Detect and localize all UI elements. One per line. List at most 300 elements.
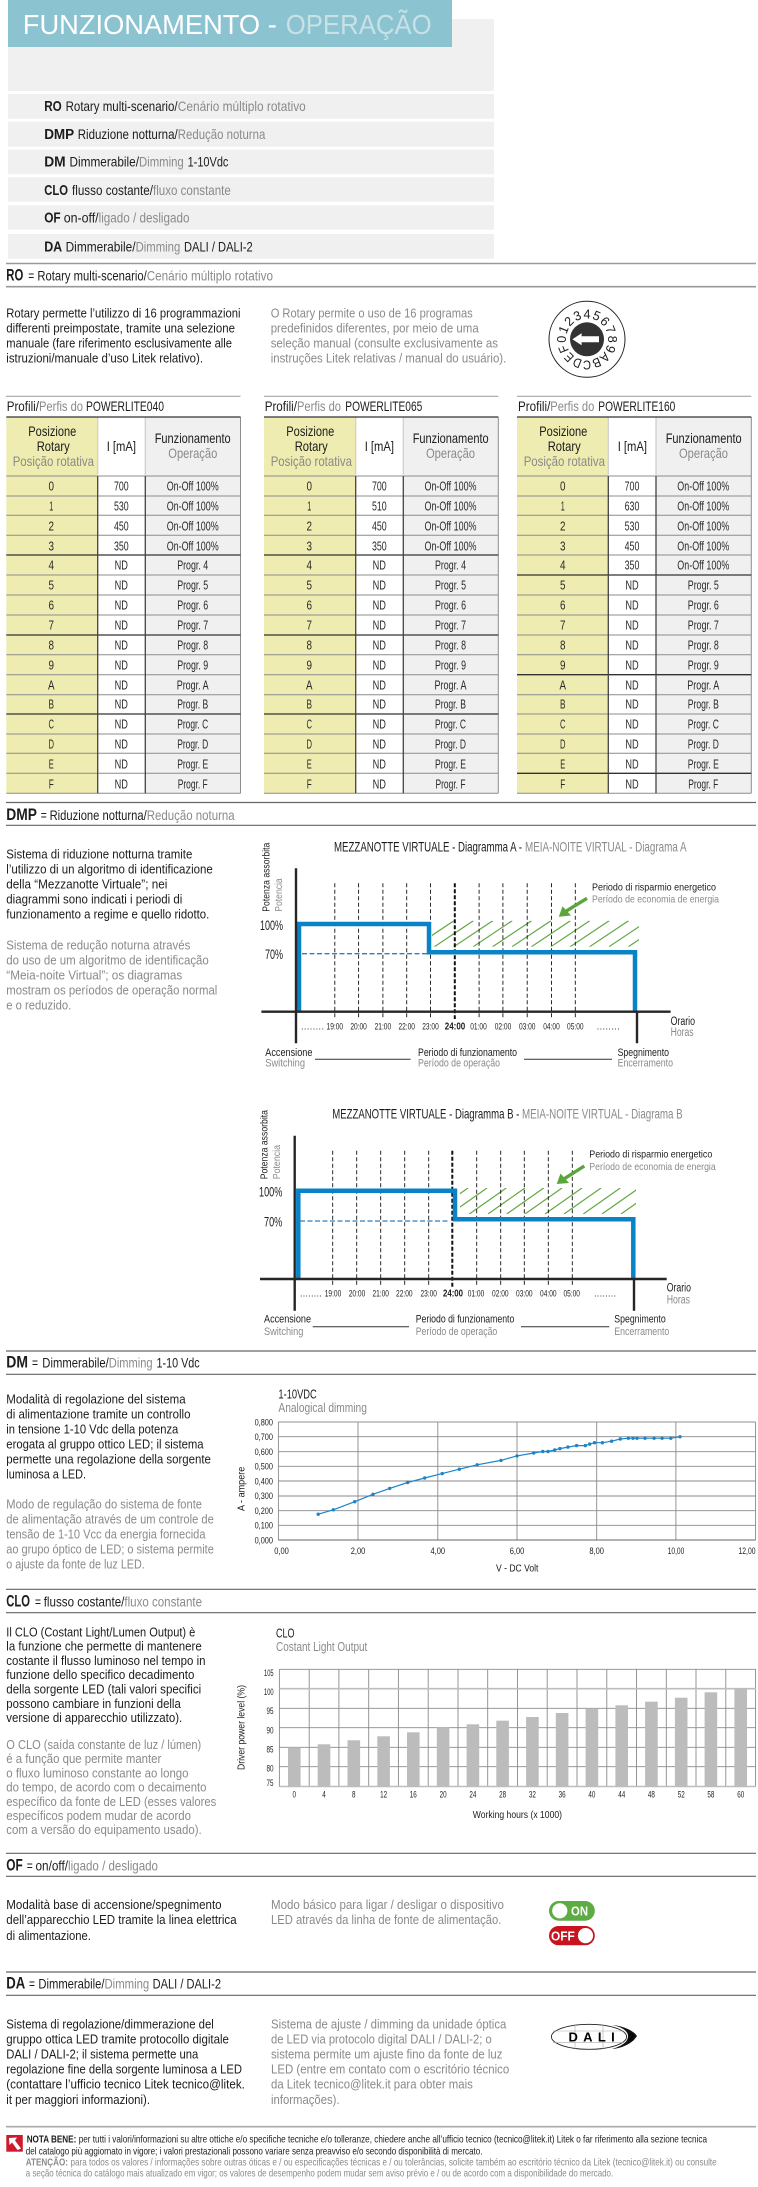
timeline captions: Periodo di funzionamento	[416, 1313, 514, 1325]
y tick labels: 0,500	[255, 1462, 273, 1472]
table rows: Progr. F	[178, 777, 208, 791]
note text: del catalogo più aggiornato in vigore; i valori prestazionali possono variare senza preavviso e/o secondo disponibilità di mercato.	[26, 2146, 483, 2158]
table rows: Progr. C	[435, 717, 466, 731]
data line	[318, 1437, 680, 1514]
table rows: B	[560, 697, 565, 711]
table rows: 1	[561, 499, 565, 513]
text block: DM italian: di alimentazione tramite un controllo	[6, 1406, 190, 1421]
heading: RO: Rotary multi-scenario/	[37, 268, 147, 284]
table rows: Progr. C	[688, 717, 719, 731]
chart: diagram B	[259, 1105, 716, 1338]
icon: rotary dial: 8	[605, 336, 620, 343]
table rows: Progr. 4	[177, 558, 208, 572]
table rows: Progr. F	[436, 777, 466, 791]
table rows: B	[49, 697, 54, 711]
icon: off toggle: OFF	[551, 1928, 575, 1943]
table: POWERLITE065	[264, 396, 498, 793]
table rows: 9	[307, 658, 312, 672]
x tick labels: 52	[678, 1789, 685, 1799]
text block: DMP portuguese: e o reduzido.	[6, 997, 71, 1012]
table rows: Progr. 5	[688, 578, 719, 592]
y tick labels: 85	[266, 1744, 274, 1754]
text block: DM italian: in tensione 1-10 Vdc della potenza	[6, 1421, 179, 1436]
table rows: ND	[625, 678, 639, 692]
text block: CLO italian: la funzione che permette di mantenere	[6, 1639, 202, 1654]
time labels: 05:00	[563, 1289, 580, 1299]
table rows: 6	[49, 598, 54, 612]
table rows: 4	[49, 558, 54, 572]
chart title: MEIA-NOITE VIRTUAL - Diagrama B	[522, 1105, 683, 1121]
x tick labels: 2,00	[351, 1546, 365, 1556]
table rows: D	[307, 737, 312, 751]
table rows: Progr. A	[687, 678, 720, 692]
index row: DA	[8, 234, 494, 259]
table rows: 0	[307, 479, 312, 493]
table rows: ND	[115, 757, 128, 771]
y tick labels: 90	[266, 1726, 274, 1736]
index row: DMP	[8, 122, 494, 147]
y axis labels: 100%	[259, 1184, 282, 1200]
arrow	[559, 898, 587, 917]
time labels: Horas	[671, 1027, 694, 1039]
text block: RO italian: manuale (fare riferimento esclusivamente alle	[6, 335, 232, 350]
index row: CLO: flusso costante/	[72, 182, 153, 198]
table rows: 510	[372, 499, 387, 513]
icon: rotary dial: C	[583, 357, 591, 372]
heading: DA: DA	[6, 1974, 25, 1993]
table rows: 0	[560, 479, 565, 493]
heading: DA	[6, 1974, 221, 1993]
index row: DMP: Riduzione notturna/	[78, 126, 178, 142]
y axis labels	[260, 842, 285, 962]
arrow	[557, 1166, 584, 1184]
table rows: 700	[114, 479, 129, 493]
table rows: On-Off 100%	[677, 499, 729, 513]
table rows: Progr. 5	[435, 578, 466, 592]
table rows: A	[48, 678, 55, 692]
y axis labels: 100%	[260, 917, 283, 933]
text block: CLO italian: versione di apparecchio utilizzato).	[6, 1710, 182, 1725]
table header: Posizione	[28, 423, 76, 439]
y tick labels	[264, 1668, 274, 1788]
x tick labels: 10,00	[668, 1546, 684, 1556]
table rows: Progr. 6	[435, 598, 466, 612]
table header: I [mA]	[365, 438, 394, 454]
timeline captions: Spegnimento	[618, 1047, 669, 1059]
table rows: ND	[625, 618, 639, 632]
y axis labels: Potenza assorbita	[262, 842, 273, 912]
index row: DM: Dimming	[139, 154, 184, 170]
timeline captions: Periodo di funzionamento	[418, 1047, 517, 1059]
table rows	[559, 479, 729, 791]
text block: CLO portuguese: específico da fonte de LED (esses valores	[6, 1794, 217, 1809]
table rows: ND	[115, 777, 128, 791]
heading: RO: RO	[6, 266, 23, 285]
table header	[13, 423, 231, 469]
icon: rotary dial: F	[555, 343, 572, 355]
text block: DMP portuguese: mostram os períodos de operação normal	[6, 982, 217, 997]
text block: RO portuguese: seleção manual (consulte exclusivamente as	[271, 335, 498, 350]
index row: DA: DA	[44, 239, 62, 256]
y tick labels: 0,300	[255, 1491, 273, 1501]
time labels: 03:00	[516, 1289, 533, 1299]
text block: DMP italian: diagrammi sono indicati i periodi di	[6, 891, 182, 906]
text block: CLO italian: Il CLO (Costant Light/Lumen Output) è	[6, 1624, 195, 1639]
table rows: ND	[115, 598, 128, 612]
x tick labels: 24	[469, 1789, 476, 1799]
table rows: 530	[114, 499, 129, 513]
x tick labels: 0	[293, 1789, 296, 1799]
text block: OF italian	[6, 1897, 237, 1943]
table rows: 7	[307, 618, 312, 632]
text block: DM italian: permette una regolazione della sorgente	[6, 1451, 211, 1466]
table rows: 6	[307, 598, 312, 612]
x tick labels	[274, 1546, 756, 1556]
table rows: Progr. 7	[435, 618, 466, 632]
heading: OF: =	[27, 1858, 33, 1874]
timeline captions	[264, 1313, 669, 1338]
table header: Funzionamento	[155, 430, 231, 446]
table rows: 2	[307, 519, 312, 533]
table rows: 450	[372, 519, 387, 533]
y tick labels: 0,000	[255, 1536, 273, 1546]
text block: RO italian: differenti preimpostate, tramite una selezione	[6, 320, 235, 335]
text block: RO italian	[6, 305, 241, 365]
table title	[265, 398, 422, 414]
table title: Perfis do	[550, 398, 594, 414]
time labels: Horas	[667, 1295, 690, 1307]
text block: CLO italian: funzione dello specifico decadimento	[6, 1667, 194, 1682]
icon: DALI logo	[551, 2024, 637, 2049]
table rows: Progr. F	[688, 777, 719, 791]
title	[8, 0, 452, 47]
text block: DA italian: DALI / DALI-2; il sistema permette una	[6, 2046, 199, 2061]
chart title: MEIA-NOITE VIRTUAL - Diagrama A	[525, 839, 687, 855]
table rows: On-Off 100%	[167, 499, 219, 513]
table rows: ND	[115, 737, 128, 751]
time labels: 01:00	[468, 1289, 484, 1299]
text block: OF portuguese: Modo básico para ligar / desligar o dispositivo	[271, 1897, 504, 1912]
table rows: 700	[372, 479, 387, 493]
table rows: E	[307, 757, 312, 771]
x tick labels: 0,00	[274, 1546, 289, 1556]
table rows: 8	[560, 638, 565, 652]
text block: DA italian: gruppo ottica LED tramite protocollo digitale	[6, 2031, 229, 2046]
time labels: 04:00	[543, 1022, 560, 1032]
table header	[524, 423, 742, 469]
text block: CLO italian: possono cambiare in funzioni della	[6, 1696, 181, 1711]
table rows: Progr. A	[434, 678, 467, 692]
text block: CLO portuguese: o fluxo luminoso constante ao longo	[6, 1765, 188, 1780]
heading: DM: Dimming	[109, 1355, 153, 1371]
table rows: ND	[115, 558, 128, 572]
text block: RO italian: Rotary permette l’utilizzo di 16 programmazioni	[6, 305, 241, 320]
table rows: 5	[307, 578, 312, 592]
time labels: 20:00	[349, 1289, 365, 1299]
text block: DMP italian: Sistema di riduzione notturna tramite	[6, 846, 192, 861]
icon: rotary dial: 0	[554, 336, 569, 343]
y tick labels: 105	[264, 1668, 274, 1678]
icon: rotary dial: 4	[584, 306, 590, 321]
table rows: 4	[560, 558, 565, 572]
table rows: E	[560, 757, 565, 771]
table rows: ND	[115, 658, 128, 672]
text block: DM italian: Modalità di regolazione del sistema	[6, 1391, 186, 1406]
table rows: Progr. A	[177, 678, 209, 692]
text block: DMP portuguese: Sistema de redução noturna através	[6, 937, 191, 952]
chart title: Costant Light Output	[276, 1639, 368, 1654]
chart title	[276, 1625, 368, 1654]
panel: function index	[8, 0, 494, 259]
table header: Operação	[679, 445, 728, 461]
heading: OF	[6, 1856, 158, 1875]
heading: DMP: DMP	[6, 805, 37, 824]
y axis labels: 70%	[265, 946, 283, 962]
table rows: F	[560, 777, 565, 791]
axis titles: Working hours (x 1000)	[473, 1809, 562, 1821]
table header	[271, 423, 489, 469]
text block: DM italian	[6, 1391, 211, 1481]
table rows: D	[560, 737, 565, 751]
table rows: On-Off 100%	[167, 479, 219, 493]
time labels	[300, 1283, 691, 1307]
table rows: ND	[373, 558, 386, 572]
table rows: On-Off 100%	[424, 519, 476, 533]
text block: DA portuguese	[271, 2016, 509, 2107]
table rows: 530	[625, 519, 639, 533]
heading: CLO: fluxo constante	[124, 1594, 202, 1610]
time labels: ........	[597, 1022, 620, 1032]
table rows: 4	[307, 558, 312, 572]
icon: on toggle: ON	[571, 1903, 588, 1918]
table rows: 450	[625, 539, 639, 553]
table rows: On-Off 100%	[677, 519, 729, 533]
time labels: 01:00	[470, 1022, 487, 1032]
table rows: 1	[49, 499, 53, 513]
time labels: 23:00	[422, 1022, 439, 1032]
text block: CLO italian: costante il flusso luminoso nel tempo in	[6, 1653, 205, 1668]
text block: DMP portuguese: “Meia-noite Virtual”; os diagramas	[6, 967, 183, 982]
y tick labels: 0,200	[255, 1506, 273, 1516]
heading: DA: =	[29, 1976, 35, 1992]
table rows: On-Off 100%	[167, 519, 219, 533]
text block: OF italian: Modalità base di accensione/spegnimento	[6, 1897, 222, 1912]
table header: Posizione	[539, 423, 587, 439]
table rows: Progr. E	[688, 757, 719, 771]
table rows: Progr. B	[688, 697, 719, 711]
y tick labels: 100	[264, 1687, 274, 1697]
saving period label	[589, 1149, 716, 1173]
icon: rotary dial: 3	[571, 307, 583, 324]
text block: DA portuguese: da Litek tecnico@litek.it para obter mais	[271, 2076, 473, 2091]
icon: rotary dial: D	[571, 354, 584, 371]
table header: Posição rotativa	[13, 453, 94, 469]
table rows: On-Off 100%	[677, 479, 729, 493]
x tick labels: 36	[559, 1789, 566, 1799]
axis titles	[236, 1685, 562, 1821]
heading: DM	[6, 1353, 200, 1372]
time labels	[301, 1016, 695, 1039]
timeline captions: Accensione	[265, 1047, 312, 1059]
table rows: 7	[49, 618, 54, 632]
timeline captions	[265, 1047, 673, 1070]
table rows: Progr. E	[435, 757, 466, 771]
note text: ATENÇÃO:	[26, 2156, 68, 2169]
table rows: ND	[625, 598, 639, 612]
y axis labels: Potencia	[274, 878, 285, 912]
index row: CLO: fluxo constante	[153, 182, 231, 198]
time labels: 05:00	[567, 1022, 584, 1032]
heading: DM: =	[32, 1355, 38, 1371]
x tick labels: 28	[499, 1789, 506, 1799]
title: FUNZIONAMENTO -	[23, 9, 277, 40]
table header: Funzionamento	[413, 430, 489, 446]
index row: OF: on-off/	[64, 210, 99, 226]
table rows: On-Off 100%	[424, 479, 476, 493]
time labels: 21:00	[372, 1289, 389, 1299]
heading: CLO: CLO	[6, 1592, 30, 1611]
heading: DMP: =	[41, 807, 47, 823]
table rows: A	[306, 678, 313, 692]
x tick labels: 60	[737, 1789, 744, 1799]
text block: DM portuguese: Modo de regulação do sistema de fonte	[6, 1496, 202, 1511]
table rows: 350	[372, 539, 387, 553]
heading: DA: Dimmerabile/	[38, 1976, 105, 1992]
timeline captions: Período de operação	[418, 1058, 500, 1070]
chart title: CLO	[276, 1625, 294, 1640]
text block: CLO portuguese: do tempo, de acordo com o decaimento	[6, 1780, 206, 1795]
table rows: 350	[625, 558, 639, 572]
table rows: 8	[307, 638, 312, 652]
table rows: On-Off 100%	[167, 539, 219, 553]
text block: DMP italian	[6, 846, 213, 921]
table header: Rotary	[548, 438, 581, 454]
table header: Posizione	[286, 423, 334, 439]
axis titles: A - ampere	[236, 1466, 247, 1511]
table rows: Progr. 6	[688, 598, 719, 612]
icon: off toggle	[549, 1926, 595, 1945]
table rows: 5	[49, 578, 54, 592]
index row: RO: Rotary multi-scenario/	[66, 98, 178, 114]
chart title: 1-10VDC	[278, 1387, 317, 1402]
heading: RO	[6, 266, 273, 285]
table rows: 7	[560, 618, 565, 632]
y axis labels: 70%	[264, 1214, 282, 1230]
table title: Profili/	[7, 398, 39, 414]
text block: CLO italian: della sorgente LED (tali valori specifici	[6, 1682, 201, 1696]
x tick labels: 8,00	[589, 1546, 604, 1556]
text block: DA portuguese: de LED via protocolo digital DALI / DALI-2; o	[271, 2031, 492, 2046]
table rows: ND	[115, 678, 128, 692]
table header: Rotary	[37, 438, 70, 454]
table rows: C	[307, 717, 312, 731]
table rows: Progr. 8	[688, 638, 719, 652]
chart: CLO bar chart	[236, 1625, 756, 1821]
table rows: ND	[625, 578, 639, 592]
heading: OF: ligado / desligado	[68, 1858, 158, 1874]
table rows: Progr. 7	[688, 618, 719, 632]
table rows: ND	[625, 658, 639, 672]
table rows: 2	[560, 519, 565, 533]
power curve	[299, 924, 635, 1012]
index row: DMP: DMP	[44, 126, 74, 143]
axis titles: V - DC Volt	[496, 1562, 538, 1574]
index row: DM: Dimmerabile/	[70, 154, 139, 170]
table rows: ND	[625, 737, 639, 751]
table rows: Progr. B	[177, 697, 208, 711]
timeline captions: Accensione	[264, 1313, 311, 1325]
table rows: 9	[560, 658, 565, 672]
table rows: Progr. D	[435, 737, 466, 751]
timeline captions: Switching	[264, 1326, 303, 1338]
text block: DMP portuguese: do uso de um algoritmo de identificação	[6, 952, 209, 967]
table rows: ND	[115, 697, 128, 711]
table rows: 8	[49, 638, 54, 652]
y tick labels: 0,800	[255, 1418, 273, 1428]
timeline captions: Encerramento	[614, 1326, 669, 1338]
heading: DMP	[6, 805, 235, 824]
table rows: 3	[560, 539, 565, 553]
chart title: MEZZANOTTE VIRTUALE - Diagramma A -	[334, 839, 522, 855]
x tick labels: 20	[440, 1789, 447, 1799]
table title: Profili/	[265, 398, 297, 414]
text block: CLO portuguese: é a função que permite manter	[6, 1751, 162, 1766]
icon: rotary dial: 7	[602, 323, 619, 336]
time labels: 19:00	[327, 1022, 343, 1032]
table title: POWERLITE160	[598, 398, 675, 414]
text block: DA italian	[6, 2016, 245, 2107]
table header: Operação	[426, 445, 475, 461]
text block: RO portuguese	[271, 305, 506, 365]
text block: DA italian: it per maggiori informazioni).	[6, 2092, 150, 2107]
y tick labels: 95	[266, 1706, 274, 1716]
y axis labels	[259, 1110, 283, 1230]
heading: CLO	[6, 1592, 202, 1611]
time labels: ........	[594, 1289, 616, 1299]
heading: OF: OF	[6, 1856, 23, 1875]
table rows: 0	[49, 479, 54, 493]
chart title	[278, 1387, 367, 1415]
icon: rotary dial: E	[561, 349, 577, 365]
table rows: 2	[49, 519, 54, 533]
table title: Profili/	[518, 398, 550, 414]
table rows: A	[559, 678, 566, 692]
heading: DM: DM	[6, 1353, 28, 1372]
text block: DM portuguese	[6, 1496, 214, 1571]
y tick labels: 0,700	[255, 1432, 273, 1442]
text block: DM portuguese: de alimentação através de um controle de	[6, 1511, 214, 1526]
heading: DM: Dimmerabile/	[42, 1355, 109, 1371]
table rows: ND	[373, 717, 386, 731]
icon: on toggle	[549, 1901, 595, 1921]
table rows: Progr. C	[177, 717, 208, 731]
note text	[26, 2134, 717, 2180]
x tick labels: 16	[410, 1789, 417, 1799]
table rows: 1	[307, 499, 311, 513]
x tick labels: 44	[618, 1789, 625, 1799]
table rows: 3	[307, 539, 312, 553]
icon: rotary dial: A	[597, 349, 613, 366]
table rows: F	[49, 777, 54, 791]
icon: DALI logo: DALI	[568, 2030, 615, 2045]
heading: DMP: Riduzione notturna/	[50, 807, 147, 823]
axis titles	[236, 1466, 538, 1574]
table rows: ND	[373, 598, 386, 612]
text block: DM italian: luminosa a LED.	[6, 1466, 86, 1481]
table rows: ND	[625, 757, 639, 771]
table rows: 9	[49, 658, 54, 672]
axis titles: Driver power level (%)	[236, 1685, 247, 1770]
